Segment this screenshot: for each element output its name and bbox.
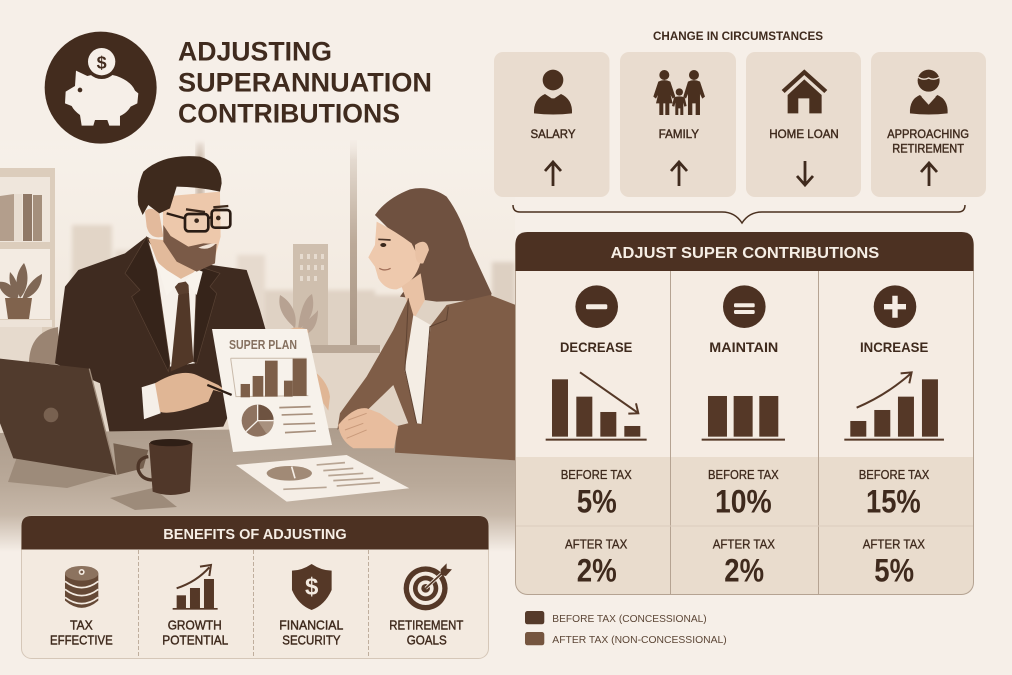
label: FINANCIAL <box>279 618 343 632</box>
icon: shield: $ <box>305 574 318 601</box>
heading: ADJUST SUPER CONTRIBUTIONS <box>611 245 880 262</box>
after tax value: 5% <box>874 553 914 589</box>
icon: coin stack <box>65 566 98 608</box>
heading: change in circumstances: CHANGE IN CIRCUMSTANCES <box>653 31 823 43</box>
icon: piggy bank badge: $ <box>97 52 107 72</box>
icon: retiree <box>910 70 948 114</box>
advisor (man in suit) <box>55 156 267 435</box>
arrow: down <box>797 161 813 185</box>
table header <box>516 232 974 271</box>
panel: adjust super contributions <box>516 232 974 594</box>
advisor's hand behind chart sheet <box>288 327 330 411</box>
table outline and dividers <box>516 233 974 594</box>
title <box>178 36 432 128</box>
icon: plus <box>874 285 916 328</box>
column: increase <box>844 285 944 589</box>
label <box>162 618 228 647</box>
chart: falling bars <box>546 372 647 441</box>
heading: BENEFITS OF ADJUSTING <box>163 527 347 543</box>
laptop <box>0 359 148 475</box>
label: INCREASE <box>860 339 928 355</box>
icon: equals <box>723 285 766 328</box>
arrow: up <box>921 163 937 186</box>
icon: minus <box>575 285 618 328</box>
before tax value <box>859 468 930 519</box>
arrow: up <box>671 162 687 186</box>
label: EFFECTIVE <box>50 633 113 647</box>
label: DECREASE <box>560 339 632 355</box>
before tax value: BEFORE TAX <box>708 468 779 482</box>
paper bar chart <box>207 358 308 397</box>
panel: approaching retirement <box>871 52 986 197</box>
benefit: financial security <box>279 564 343 647</box>
lower chart sheet on table <box>236 455 409 502</box>
before tax value <box>561 468 632 519</box>
label <box>50 618 113 647</box>
background plant <box>279 294 318 335</box>
label <box>389 618 464 647</box>
client (woman in blazer) <box>337 188 520 461</box>
title: CONTRIBUTIONS <box>178 98 400 128</box>
before tax value <box>708 468 779 519</box>
legend <box>525 611 727 646</box>
panel: salary <box>494 52 610 197</box>
label: HOME LOAN <box>769 129 839 141</box>
before tax value: BEFORE TAX <box>561 468 632 482</box>
paper: super plan chart <box>207 329 332 452</box>
lower cells <box>516 457 974 594</box>
legend: AFTER TAX (NON-CONCESSIONAL) <box>552 634 727 646</box>
column: decrease <box>546 285 647 589</box>
title: SUPERANNUATION <box>178 68 432 98</box>
panel header <box>22 516 488 550</box>
before tax value: BEFORE TAX <box>859 468 930 482</box>
icon: piggy bank badge <box>45 32 157 144</box>
icon: house <box>782 69 827 113</box>
legend: BEFORE TAX (CONCESSIONAL) <box>552 613 707 625</box>
before tax value: 15% <box>866 483 921 519</box>
before tax value: 5% <box>577 483 617 519</box>
after tax value <box>565 538 628 589</box>
label: RETIREMENT <box>892 144 964 156</box>
chart: rising bars <box>844 372 944 441</box>
icon: family <box>653 70 705 115</box>
label <box>887 129 969 156</box>
icon: person <box>534 70 572 114</box>
after tax value: 2% <box>577 553 617 589</box>
arrow: up <box>545 162 561 186</box>
table surface <box>0 428 515 552</box>
panel: benefits of adjusting <box>22 516 488 658</box>
coffee mug <box>138 439 193 495</box>
label: POTENTIAL <box>162 633 228 647</box>
label <box>279 618 343 647</box>
label: RETIREMENT <box>389 618 464 632</box>
after tax value: AFTER TAX <box>863 538 926 552</box>
paper title: SUPER PLAN <box>229 338 297 352</box>
label: FAMILY <box>659 129 699 141</box>
icon: target <box>404 563 452 610</box>
label: MAINTAIN <box>709 339 778 355</box>
before tax value: 10% <box>715 483 772 519</box>
label: SECURITY <box>282 633 341 647</box>
panel: family <box>620 52 736 197</box>
label: GROWTH <box>168 618 222 632</box>
title: ADJUSTING <box>178 36 332 66</box>
after tax value: 2% <box>724 553 764 589</box>
label: SALARY <box>530 129 576 141</box>
after tax value: AFTER TAX <box>565 538 628 552</box>
benefit: tax effective <box>50 566 113 647</box>
icon: growth chart <box>173 565 218 610</box>
illustration: advisor meeting scene <box>0 135 520 552</box>
benefit: growth potential <box>162 565 228 647</box>
bookshelf with binders and plant <box>0 168 55 360</box>
office window and skyline backdrop <box>0 135 515 443</box>
chair back <box>29 327 60 365</box>
label: APPROACHING <box>887 129 969 141</box>
table shadows <box>8 457 177 510</box>
after tax value <box>863 538 926 589</box>
brace connector <box>513 205 965 223</box>
after tax value: AFTER TAX <box>713 538 776 552</box>
paper pie chart <box>242 405 316 437</box>
chart: level bars <box>702 396 785 441</box>
column: maintain <box>702 285 785 589</box>
benefit: retirement goals <box>389 563 464 647</box>
after tax value <box>713 538 776 589</box>
label: TAX <box>70 618 93 632</box>
label: GOALS <box>407 633 447 647</box>
panel: home loan <box>746 52 861 197</box>
